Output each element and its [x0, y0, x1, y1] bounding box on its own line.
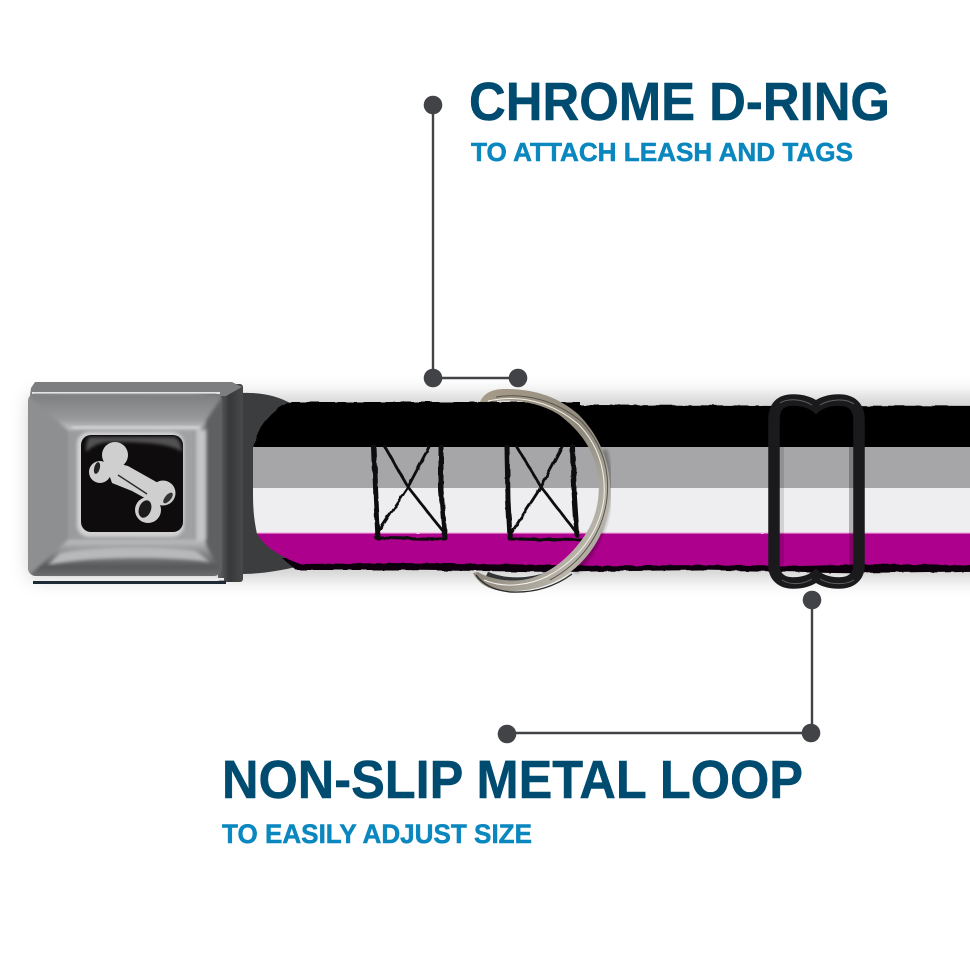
ring dark edge: [476, 574, 572, 592]
buckle bevel highlight: [72, 426, 200, 429]
buckle rim highlight: [32, 392, 220, 394]
callout: metal loop leader: [498, 591, 821, 743]
buckle bevels: [24, 394, 225, 578]
badge: [81, 435, 183, 532]
ring rear arc: [487, 573, 552, 580]
infographic canvas: [20, 82, 970, 844]
collar strap: [240, 393, 970, 574]
loop body: [774, 400, 859, 583]
subheading: metal loop: TO EASILY ADJUST SIZE: [222, 819, 532, 849]
callout: chrome D-ring leader: [424, 96, 527, 387]
heading: chrome D-ring: CHROME D-RING: [469, 72, 890, 132]
subheading: chrome D-ring: TO ATTACH LEASH AND TAGS: [471, 137, 853, 167]
ring highlight: [484, 399, 604, 585]
icon: chrome D-ring: [473, 389, 610, 592]
icon: seatbelt buckle: [24, 382, 243, 584]
stitching: second box: [507, 447, 585, 540]
loop highlight: [780, 400, 854, 584]
strap: purple stripe: [257, 533, 970, 566]
strap: black stripe: [253, 402, 970, 448]
badge frame: [77, 432, 184, 537]
icon: non-slip metal loop: [774, 400, 859, 584]
buckle rear tab: [240, 393, 300, 574]
buckle bottom edge: [33, 581, 226, 584]
buckle plate: [28, 394, 221, 576]
buckle side bar: [218, 384, 243, 582]
soft shadow behind collar: [30, 396, 970, 578]
strap: grey stripe: [253, 447, 970, 489]
buckle bottom highlight: [34, 578, 224, 580]
heading: metal loop: NON-SLIP METAL LOOP: [222, 750, 803, 810]
ring body: [473, 389, 610, 591]
buckle top rim: [30, 382, 242, 396]
badge gloss: [86, 437, 182, 452]
strap: lower black edge: [282, 558, 970, 573]
strap: purple edge highlight: [258, 532, 970, 534]
icon: bone: [89, 442, 176, 523]
ring inner dark line: [496, 396, 608, 580]
loop inner shadow: [849, 447, 856, 565]
stitching: first box: [374, 447, 445, 539]
strap: white stripe: [253, 488, 970, 534]
ring shadow: [575, 450, 609, 572]
